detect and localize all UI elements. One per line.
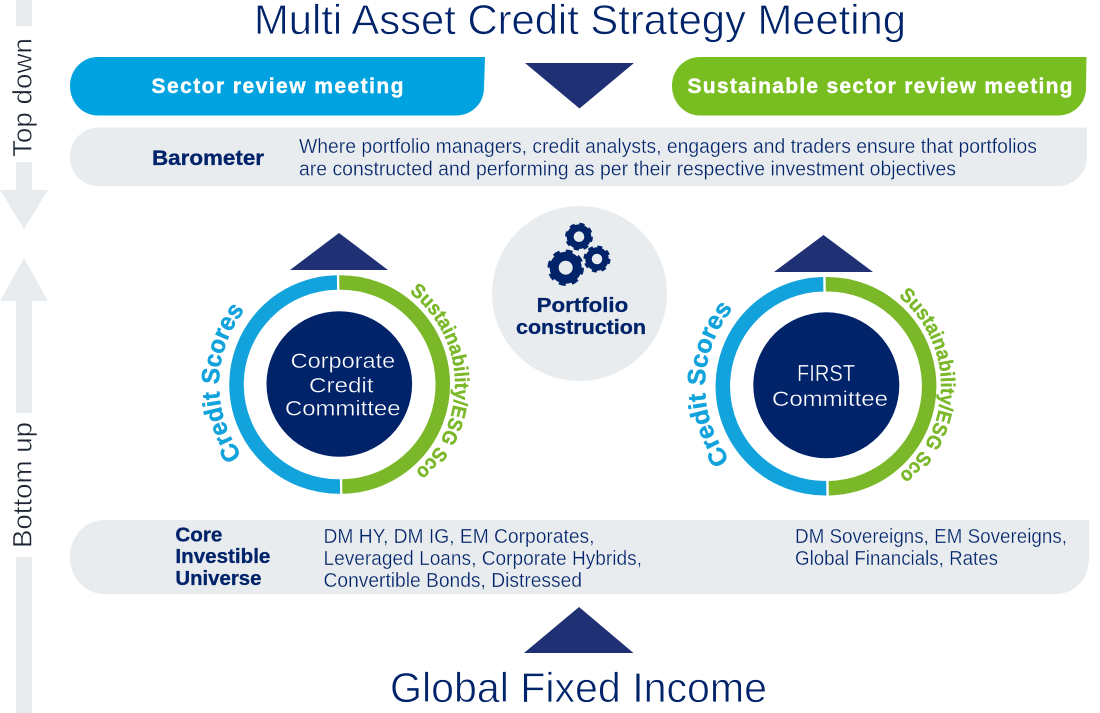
corporate credit committee circle: Committee bbox=[285, 396, 400, 420]
blue arc bbox=[723, 284, 826, 488]
bottom up arrow bbox=[0, 258, 48, 713]
panel: portfolio construction bbox=[492, 206, 667, 381]
green arc bbox=[826, 284, 929, 488]
sustainability label: Sustainability/ESG Sco bbox=[411, 284, 470, 478]
core investible universe heading: Investible bbox=[175, 545, 270, 568]
arrow: up from global fixed income bbox=[524, 607, 634, 653]
left committee ring bbox=[202, 233, 470, 494]
bottom up arrow: Bottom up bbox=[8, 422, 38, 548]
corporate credit committee circle: Credit bbox=[309, 374, 374, 398]
right committee ring bbox=[688, 235, 956, 496]
top down arrow bbox=[0, 0, 48, 229]
portfolio construction label bbox=[516, 294, 646, 339]
sovereign universe list bbox=[795, 526, 1067, 570]
panel: barometer bbox=[70, 128, 1087, 186]
sovereign universe list: Global Financials, Rates bbox=[795, 548, 998, 570]
barometer description bbox=[299, 136, 1037, 180]
credit scores label: Credit Scores bbox=[202, 304, 243, 462]
barometer description: are constructed and performing as per their respective investment objectives bbox=[299, 158, 956, 180]
panel: core investible universe bbox=[70, 520, 1089, 594]
sustainability label: Sustainability/ESG Sco bbox=[900, 288, 956, 481]
corporate universe list: DM HY, DM IG, EM Corporates, bbox=[324, 526, 594, 548]
pill: sustainable sector review meeting bbox=[672, 57, 1086, 116]
corporate universe list bbox=[324, 526, 642, 592]
global fixed income heading: Global Fixed Income bbox=[390, 664, 767, 711]
first committee circle: FIRST bbox=[797, 360, 855, 386]
core investible universe heading bbox=[175, 524, 270, 590]
green arc bbox=[339, 282, 443, 486]
corporate credit committee circle: Corporate bbox=[291, 349, 395, 373]
barometer heading: Barometer bbox=[152, 147, 264, 170]
portfolio construction label: Portfolio bbox=[537, 294, 628, 317]
arrow: down to barometer bbox=[525, 63, 634, 108]
first committee circle: Committee bbox=[772, 387, 888, 411]
arrow: up from first ring bbox=[774, 235, 873, 272]
corporate universe list: Leveraged Loans, Corporate Hybrids, bbox=[324, 548, 642, 570]
core investible universe heading: Core bbox=[175, 524, 222, 547]
pill: sector review meeting: Sector review meeting bbox=[152, 75, 404, 98]
barometer description: Where portfolio managers, credit analysts, engagers and traders ensure that portfolios bbox=[299, 136, 1037, 158]
core investible universe heading: Universe bbox=[175, 567, 261, 590]
icon: gears bbox=[550, 224, 609, 284]
blue arc bbox=[237, 282, 340, 487]
top down arrow: Top down bbox=[8, 38, 38, 157]
portfolio construction label: construction bbox=[516, 316, 646, 339]
sovereign universe list: DM Sovereigns, EM Sovereigns, bbox=[795, 526, 1067, 548]
arrow: up from corporate ring bbox=[290, 233, 388, 270]
credit scores label: Credit Scores bbox=[688, 303, 731, 466]
corporate universe list: Convertible Bonds, Distressed bbox=[324, 570, 582, 592]
first committee circle bbox=[753, 312, 899, 458]
pill: sustainable sector review meeting: Sustainable sector review meeting bbox=[688, 75, 1072, 98]
pill: sector review meeting bbox=[70, 57, 485, 116]
corporate credit committee circle bbox=[266, 311, 412, 457]
